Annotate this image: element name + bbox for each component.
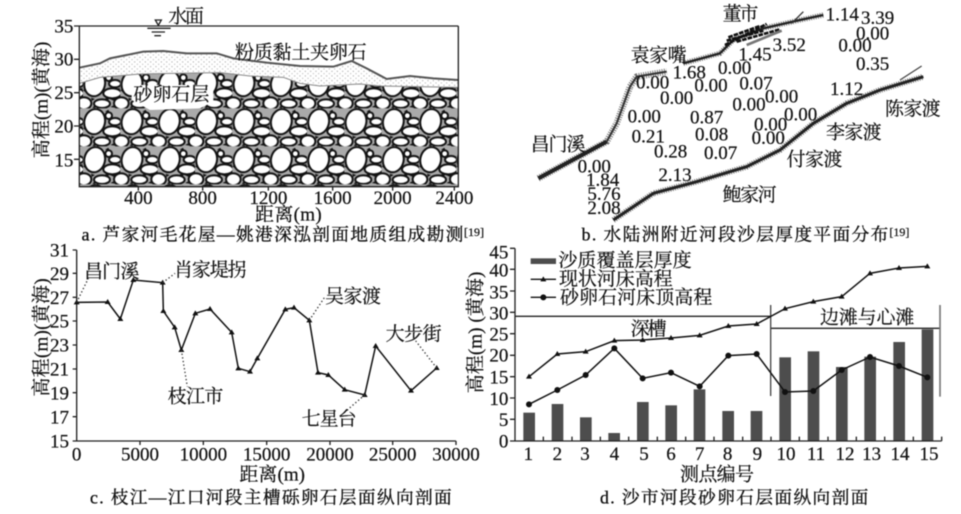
y axis title: 高程(m) (黄海) [465, 272, 487, 393]
site labels: 吴家渡 [325, 286, 381, 308]
x tick labels: 9 [753, 444, 762, 465]
y tick labels: 5 [499, 410, 508, 431]
caption b: [19] [889, 225, 909, 239]
x tick labels [72, 445, 480, 466]
bar series: sand cover thickness [523, 329, 933, 441]
x tick labels: 2400 [435, 188, 473, 209]
label: water surface: 水面 [168, 6, 204, 28]
caption d: d. 沙市河段砂卵石层面纵向剖面 [600, 487, 868, 507]
x tick labels: 13 [862, 444, 881, 465]
legend: 现状河床高程 [559, 268, 673, 290]
upper river bank [538, 12, 823, 178]
x axis title: 测点编号 [680, 464, 754, 486]
x tick labels: 20000 [306, 445, 354, 466]
thickness values: 5.76 [587, 184, 621, 205]
x tick labels [124, 188, 473, 209]
y tick labels: 15 [489, 367, 508, 388]
legend [531, 250, 712, 308]
thickness values: 0.00 [636, 72, 669, 93]
thickness values: 0.00 [856, 23, 889, 44]
icon: water level symbol [147, 20, 171, 36]
x tick labels: 11 [807, 444, 825, 465]
caption a: a. 芦家河毛花屋—姚港深泓剖面地质组成勘测 [82, 225, 463, 245]
thickness values: 2.13 [658, 165, 692, 186]
zone label: bars and shoals: 边滩与心滩 [820, 306, 914, 328]
y tick labels: 15 [50, 432, 69, 453]
x tick labels [524, 444, 938, 465]
thickness values: 0.00 [694, 76, 728, 97]
caption b: b. 水陆洲附近河段沙层厚度平面分布 [582, 225, 888, 245]
y tick labels: 20 [54, 116, 73, 137]
place names: 鲍家河 [723, 184, 777, 206]
x tick labels: 15 [920, 444, 938, 465]
site labels: 昌门溪 [84, 260, 139, 282]
y tick labels: 17 [50, 407, 69, 428]
thickness values: 0.07 [739, 73, 773, 94]
x tick labels: 1 [524, 444, 533, 465]
y tick labels: 40 [489, 261, 508, 282]
thickness values: 1.12 [830, 79, 863, 100]
legend: 沙质覆盖层厚度 [558, 250, 692, 272]
y tick labels: 20 [489, 346, 508, 367]
y tick labels: 15 [54, 150, 73, 171]
x axis title: 距离(m) [255, 204, 322, 226]
thickness values: 0.00 [838, 36, 872, 57]
thickness values: 0.00 [578, 157, 611, 178]
thickness values: 3.52 [773, 35, 806, 56]
thickness values: 0.87 [690, 107, 723, 128]
gravel bed top line [526, 345, 930, 407]
x tick labels: 5000 [121, 445, 159, 466]
x tick labels: 10000 [180, 445, 227, 466]
site labels: 枝江市 [168, 385, 223, 407]
label: silty clay: 粉质黏土夹卵石 [235, 41, 367, 63]
thickness values: 0.00 [732, 95, 766, 116]
thickness values: 0.35 [856, 54, 889, 75]
thickness values: 0.21 [632, 127, 665, 148]
thickness values: 0.00 [660, 88, 693, 109]
thickness values: 1.14 [826, 5, 859, 26]
y tick labels: 25 [50, 312, 69, 333]
place names: 袁家嘴 [631, 45, 687, 67]
dotted leaders [77, 273, 437, 413]
y tick labels: 27 [50, 288, 69, 309]
y tick labels: 35 [54, 16, 73, 37]
section drawing: sediment and cobble layers [79, 49, 458, 187]
axes [73, 250, 456, 445]
x tick labels: 8 [723, 444, 732, 465]
x tick labels: 15000 [243, 445, 290, 466]
thickness values: 1.68 [673, 62, 706, 83]
y tick labels: 30 [54, 50, 73, 71]
x tick labels: 400 [124, 188, 153, 209]
plot frame and y ticks [74, 26, 458, 191]
site labels: 肖家堤拐 [174, 259, 247, 281]
x axis title: 距离(m) [239, 464, 305, 486]
thickness values: 0.07 [704, 143, 737, 164]
x tick labels: 10 [776, 444, 796, 465]
y tick labels [54, 16, 73, 171]
thickness values: 0.00 [718, 58, 751, 79]
y tick labels: 21 [50, 360, 69, 381]
thickness values: 0.28 [654, 141, 687, 162]
panel d: Shashi reach profile [465, 242, 942, 507]
place names: 陈家渡 [885, 98, 941, 120]
x tick labels: 3 [580, 444, 590, 465]
y tick labels: 10 [489, 389, 508, 410]
caption a: [19] [464, 225, 484, 239]
current riverbed line [526, 263, 930, 379]
panel b: sand thickness plan map [531, 3, 941, 245]
axes [510, 248, 942, 441]
y tick labels: 25 [489, 325, 508, 346]
x tick labels: 30000 [432, 445, 480, 466]
lower river bank [613, 66, 923, 220]
thickness values: 0.00 [754, 115, 787, 136]
site labels: 大步街 [386, 323, 442, 345]
y tick labels: 29 [50, 264, 69, 285]
thickness values: 2.08 [587, 198, 621, 219]
thickness values: 1.84 [586, 170, 620, 191]
zone dividers [515, 305, 940, 397]
place names: 付家渡 [787, 149, 842, 171]
place names: 李家渡 [826, 121, 882, 143]
site labels [84, 259, 442, 430]
y tick labels: 31 [50, 241, 69, 262]
y tick labels: 35 [489, 282, 508, 303]
caption c: c. 枝江—江口河段主槽砾卵石层面纵向剖面 [90, 487, 452, 507]
y tick labels: 45 [489, 242, 508, 263]
x tick labels: 7 [695, 444, 704, 465]
y axis title: 高程(m)(黄海) [31, 42, 53, 158]
site labels: 七星台 [302, 408, 357, 430]
y tick labels: 30 [489, 303, 508, 324]
thickness values: 0.00 [752, 128, 785, 149]
panel c: longitudinal profile Zhijiang to Jiangkou [31, 241, 480, 507]
x tick labels: 800 [188, 188, 217, 209]
label: gravel layer: 砂卵石层 [133, 84, 209, 106]
y tick labels: 25 [54, 83, 73, 104]
profile line with triangle markers [74, 277, 440, 397]
x tick labels: 12 [836, 444, 854, 465]
thickness values: 3.39 [861, 8, 894, 29]
place names: 董市 [723, 3, 758, 25]
legend: 砂卵石河床顶高程 [560, 286, 712, 308]
thickness values: 0.08 [695, 125, 728, 146]
x tick labels: 2000 [374, 188, 412, 209]
x tick labels: 14 [890, 444, 910, 465]
thickness values: 0.00 [765, 87, 798, 108]
thickness values: 0.00 [784, 105, 817, 126]
y tick labels: 0 [499, 431, 508, 452]
x tick labels: 6 [666, 444, 676, 465]
y tick labels: 23 [50, 336, 69, 357]
thickness values: 0.00 [628, 107, 661, 128]
y axis title: 高程(m)(黄海) [31, 278, 53, 397]
y tick labels [50, 241, 69, 453]
panel a: geological section [31, 6, 484, 245]
x tick labels: 5 [639, 444, 649, 465]
y tick labels: 19 [50, 383, 69, 404]
x tick labels: 4 [610, 444, 620, 465]
x tick labels: 0 [72, 445, 81, 466]
zone label: deep channel: 深槽 [631, 318, 667, 340]
place names [531, 3, 941, 206]
thickness values: 1.45 [738, 45, 772, 66]
y tick labels [489, 242, 508, 452]
thickness values [578, 5, 894, 219]
place names: 昌门溪 [531, 134, 585, 156]
x tick labels: 25000 [369, 445, 416, 466]
x tick labels: 2 [553, 444, 562, 465]
x tick labels: 1200 [249, 188, 287, 209]
x tick labels: 1600 [314, 188, 352, 209]
